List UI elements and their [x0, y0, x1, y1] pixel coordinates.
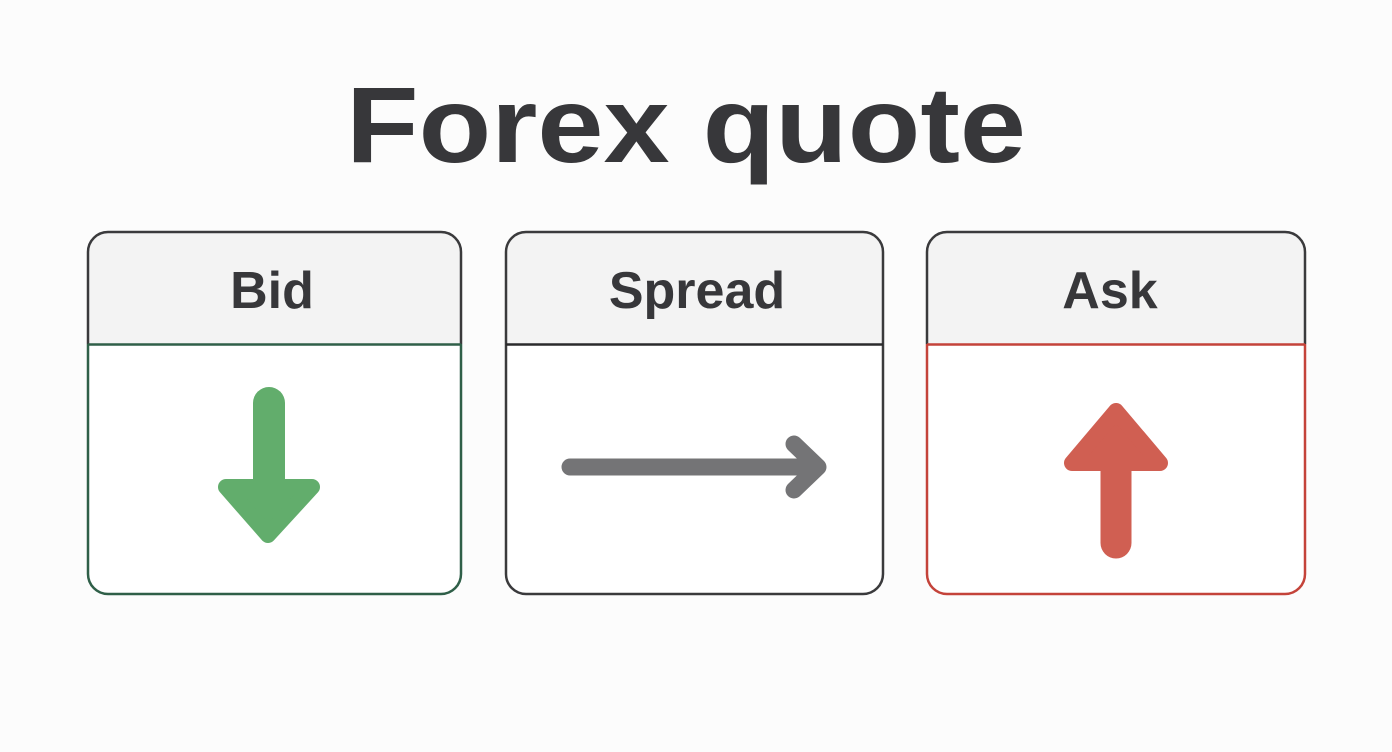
panel: bid	[88, 232, 461, 594]
panel: spread	[506, 232, 883, 594]
heading: Spread: Spread	[609, 262, 785, 320]
panel: ask	[927, 232, 1305, 594]
heading: Bid: Bid	[230, 262, 314, 320]
heading: Ask: Ask	[1062, 262, 1158, 320]
icon: right arrow	[570, 444, 818, 490]
title: Forex quote	[346, 64, 1026, 185]
icon: up arrow	[1072, 411, 1160, 543]
icon: down arrow	[226, 403, 312, 535]
